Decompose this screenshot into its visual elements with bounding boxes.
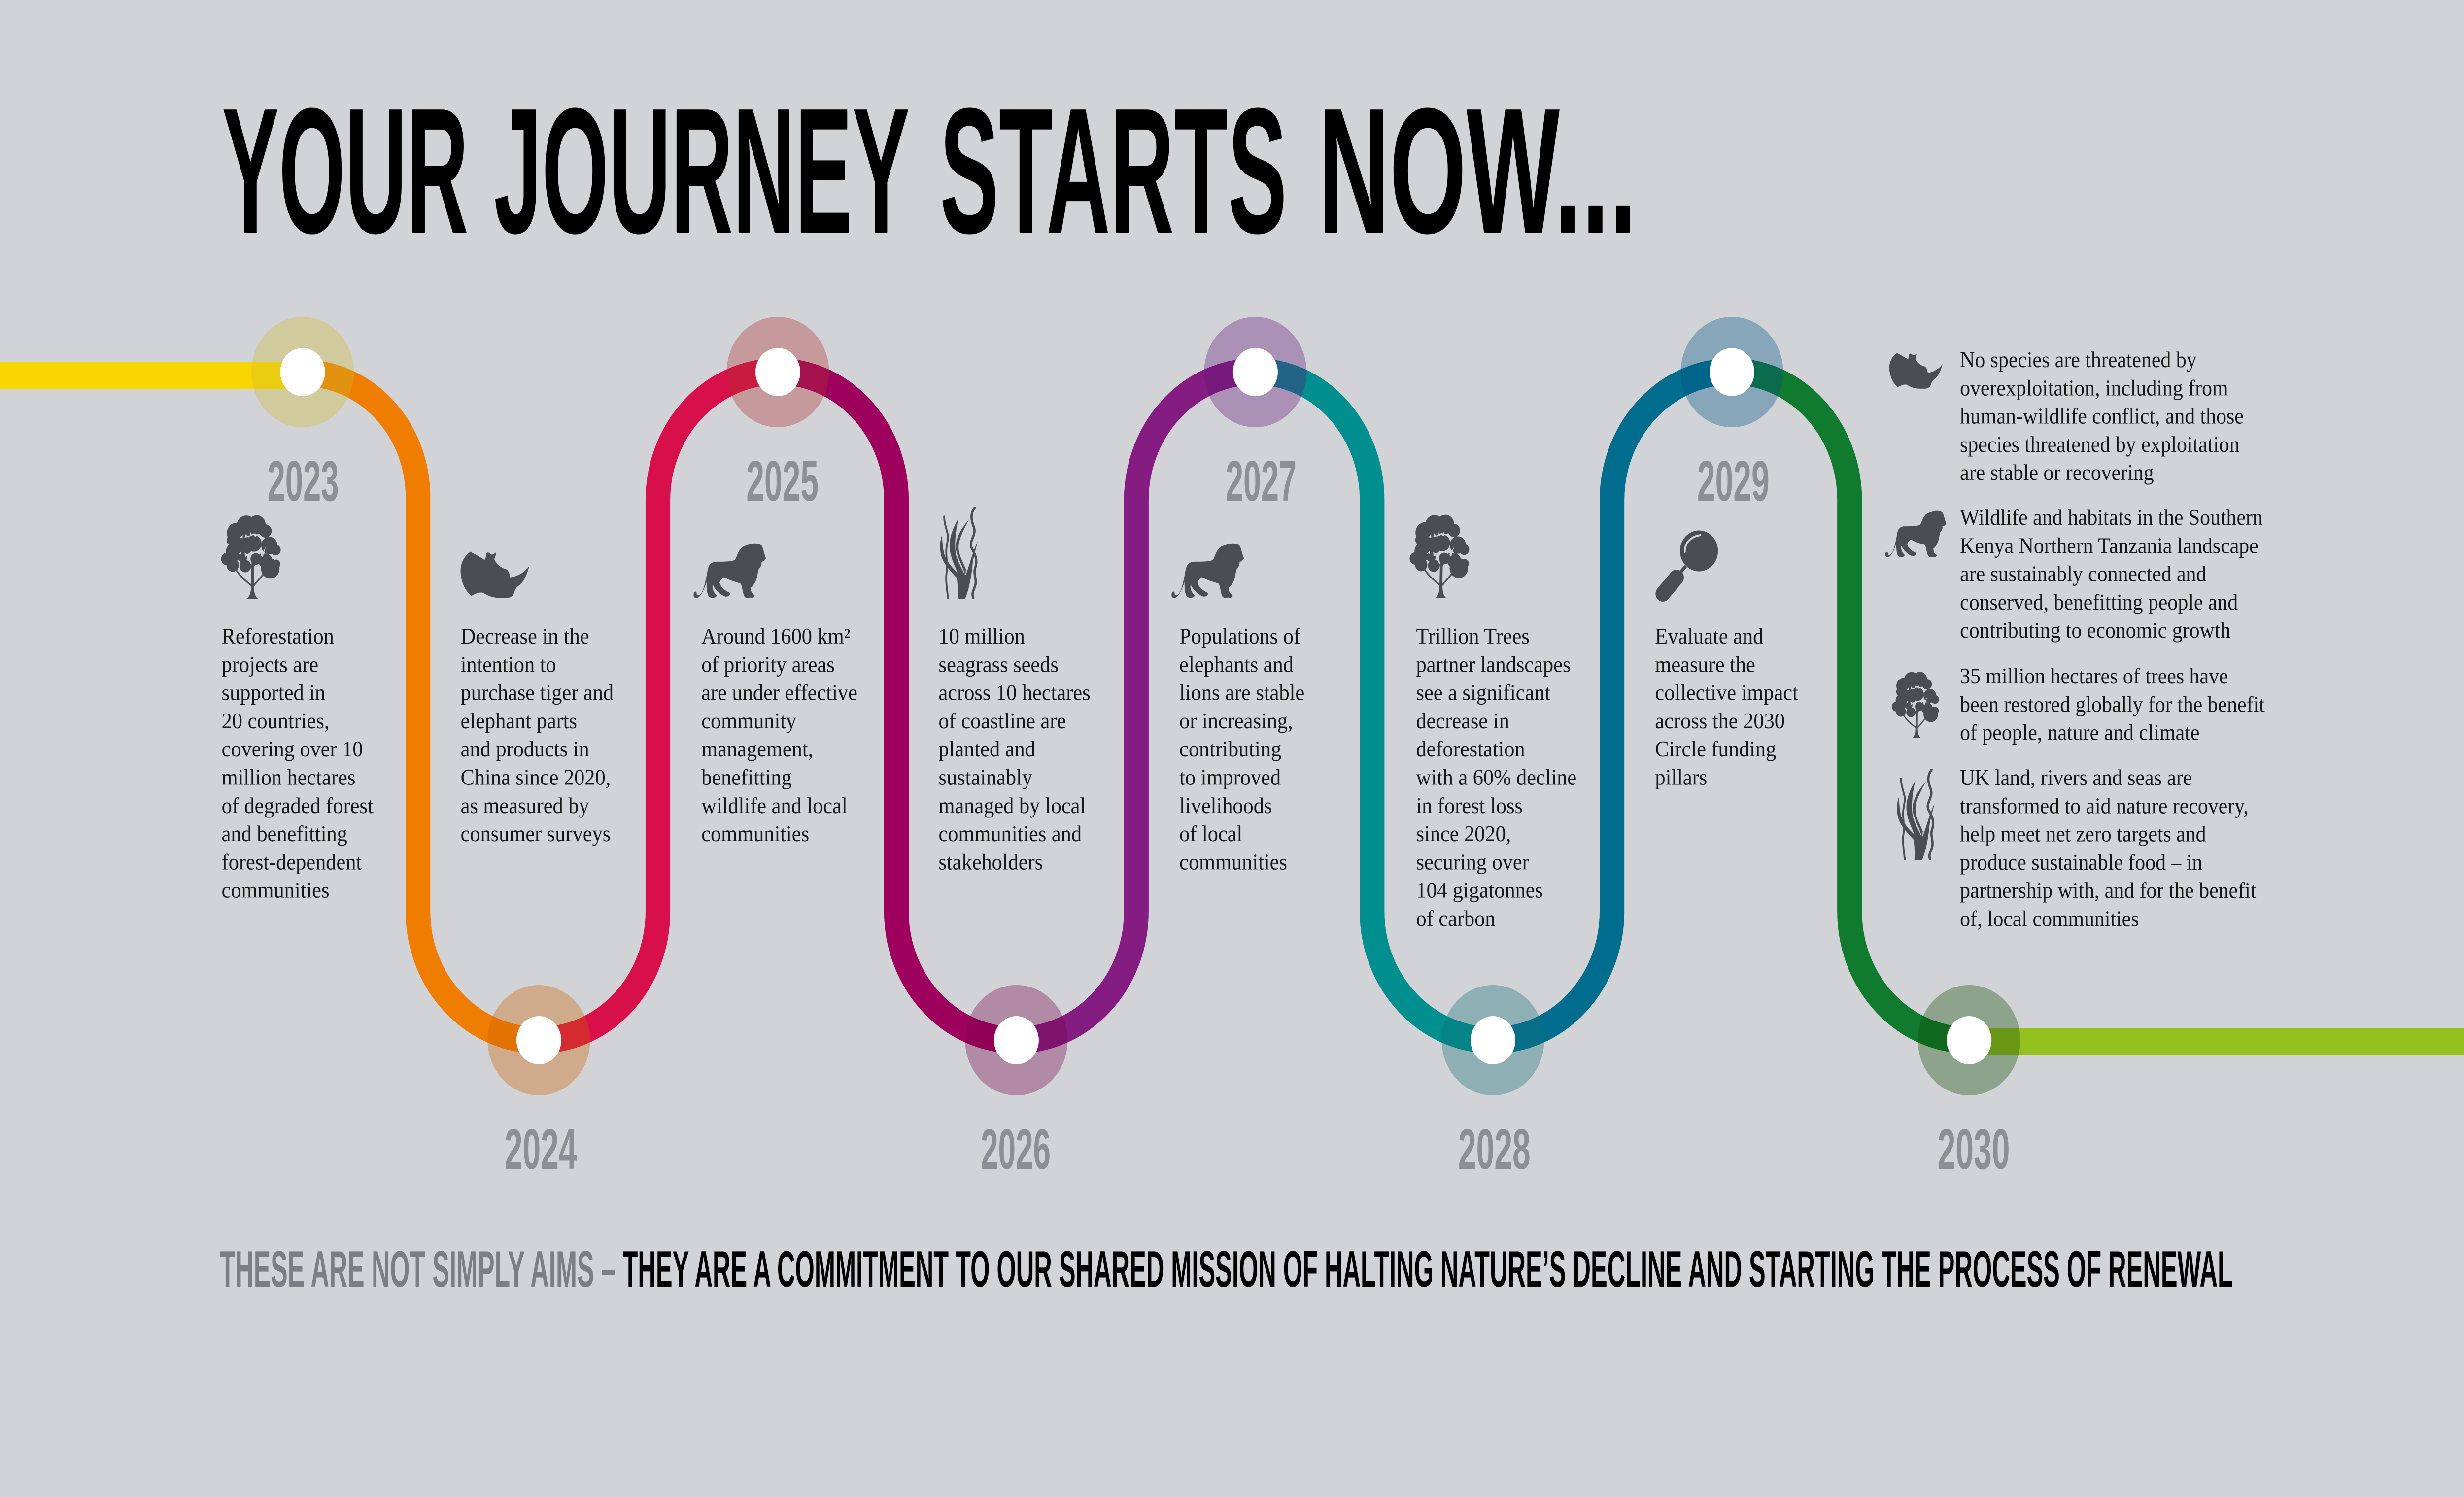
text: 2024: as measured by [461,793,589,818]
text: 2028: securing over [1416,850,1529,875]
text: 2027: to improved [1179,765,1281,790]
text: 2027: of local [1179,821,1242,846]
icon: lion 2027 [1171,544,1244,598]
text: 2026: communities and [938,821,1082,846]
text: 2026: managed by local [938,793,1086,818]
text: 2023: communities [222,878,329,903]
text: 2028: decrease in [1416,708,1509,733]
text: 2025: Around 1600 km² [701,624,850,648]
icon: lion 2025 [693,544,766,598]
text: 2030 UK: transformed to aid nature recovery, [1960,794,2249,818]
text: 2024: and products in [461,737,589,762]
text: 2023: supported in [222,680,325,705]
text: 2028: with a 60% decline [1416,765,1576,790]
text: 2026: sustainably [938,765,1032,790]
node 2023 [251,317,354,427]
text: 2023: Reforestation [222,624,334,648]
closing statement: THESE ARE NOT SIMPLY AIMS – [220,1241,616,1298]
text: 2025: wildlife and local [701,793,848,818]
text: 2030 trees: been restored globally for the benefit [1960,692,2265,717]
segment 2025-2026 [778,372,1016,1040]
icon: seagrass 2030 [1897,770,1934,860]
title: STARTS [940,71,1287,271]
text: 2029: across the 2030 [1655,708,1785,733]
icon: rhino 2024 [461,552,529,598]
text: 2030 UK: partnership with, and for the benefit [1960,879,2256,903]
start line: yellow [0,362,303,389]
text: 2027: contributing [1179,737,1281,762]
node 2025 [726,317,829,427]
text: 2024: Decrease in the [461,624,589,648]
year 2023: 2023 [268,449,339,513]
text: 2025: benefitting [701,765,792,790]
text: 2030 species: No species are threatened by [1960,348,2197,372]
node 2029 [1680,317,1783,427]
text: 2028: in forest loss [1416,793,1523,818]
text: 2025: management, [701,737,813,762]
text: 2026: 10 million [938,624,1025,648]
node 2030 [1918,985,2020,1095]
segment 2027-2028 [1255,372,1493,1040]
text: 2030 wildlife: conserved, benefitting people and [1960,590,2238,614]
end line: lime [1969,1028,2464,1055]
text: 2026: seagrass seeds [938,652,1059,677]
text: 2027: lions are stable [1179,680,1304,705]
icon: tree 2030 [1892,672,1939,738]
text: 2023: million hectares [222,765,355,790]
text: 2025: communities [701,821,809,846]
icon: tree 2023 [221,515,281,599]
text: 2025: are under effective [701,680,857,705]
text: 2027: or increasing, [1179,708,1293,733]
text: 2029: Circle funding [1655,737,1776,762]
text: 2025: of priority areas [701,652,835,677]
text: 2030 UK: UK land, rivers and seas are [1960,766,2192,790]
title [222,71,1637,271]
segment 2028-2029 [1493,372,1732,1040]
text: 2024: China since 2020, [461,765,611,790]
text: 2030 trees: 35 million hectares of trees have [1960,664,2228,688]
text: 2030 UK: produce sustainable food – in [1960,851,2203,875]
segment 2023-2024 [303,373,539,1040]
icon: magnifying glass 2029 [1663,530,1718,594]
icon: tree 2028 [1409,515,1470,598]
title: NOW... [1318,71,1637,271]
year 2029: 2029 [1697,449,1770,513]
year 2024: 2024 [505,1117,577,1181]
text: 2028: deforestation [1416,737,1525,762]
year 2028: 2028 [1458,1117,1531,1181]
text: 2027: elephants and [1179,652,1294,677]
text: 2028: of carbon [1416,906,1496,931]
text: 2030 wildlife: contributing to economic growth [1960,618,2230,643]
text: 2023: forest-dependent [222,850,362,875]
text: 2026: stakeholders [938,850,1043,875]
node 2024 [487,985,590,1095]
text: 2024: consumer surveys [461,821,611,846]
node 2028 [1441,985,1544,1095]
text: 2030 wildlife: Kenya Northern Tanzania landscape [1960,534,2259,558]
text: 2030 species: species threatened by exploitation [1960,433,2240,457]
text: 2030 species: are stable or recovering [1960,461,2154,485]
icon: lion 2030 [1885,511,1946,557]
text: 2023: 20 countries, [222,708,329,733]
icon: seagrass 2026 [940,508,978,599]
text: 2028: partner landscapes [1416,652,1571,677]
year 2026: 2026 [981,1117,1051,1181]
text: 2028: 104 gigatonnes [1416,878,1543,903]
text: 2025: community [701,708,796,733]
text: 2028: since 2020, [1416,821,1511,846]
text: 2024: intention to [461,652,556,677]
text: 2023: projects are [222,652,318,677]
node 2027 [1204,317,1306,427]
text: 2030 species: human-wildlife conflict, and those [1960,404,2244,429]
text: 2026: planted and [938,737,1035,762]
text: 2023: covering over 10 [222,737,363,762]
text: 2027: communities [1179,850,1287,875]
title: JOURNEY [494,71,910,271]
year 2025: 2025 [746,449,819,513]
text: 2026: of coastline are [938,708,1066,733]
segment 2024-2025 [539,372,778,1040]
text: 2030 UK: help meet net zero targets and [1960,822,2206,847]
text: 2028: Trillion Trees [1416,624,1530,648]
text: 2030 species: overexploitation, including from [1960,376,2228,401]
year 2027: 2027 [1226,449,1297,513]
segment 2026-2027 [1016,372,1255,1040]
text: 2030 UK: of, local communities [1960,907,2139,931]
text: 2027: livelihoods [1179,793,1272,818]
text: 2029: measure the [1655,652,1755,677]
title: YOUR [222,71,468,271]
text: 2023: of degraded forest [222,793,374,818]
segment 2029-2030 [1732,372,1969,1040]
icon: rhino 2030 [1889,353,1943,389]
text: 2024: purchase tiger and [461,680,614,705]
text: 2029: Evaluate and [1655,624,1763,648]
year 2030: 2030 [1938,1117,2010,1181]
text: 2030 wildlife: are sustainably connected and [1960,562,2207,586]
node 2026 [965,985,1067,1095]
text: 2026: across 10 hectares [938,680,1091,705]
text: 2024: elephant parts [461,708,577,733]
text: 2029: pillars [1655,765,1707,790]
timeline path [303,372,1969,1040]
text: 2023: and benefitting [222,821,347,846]
text: 2030 trees: of people, nature and climate [1960,720,2199,745]
text: 2030 wildlife: Wildlife and habitats in the Southern [1960,506,2263,530]
text: 2027: Populations of [1179,624,1300,648]
text: 2029: collective impact [1655,680,1798,705]
text: 2028: see a significant [1416,680,1550,705]
